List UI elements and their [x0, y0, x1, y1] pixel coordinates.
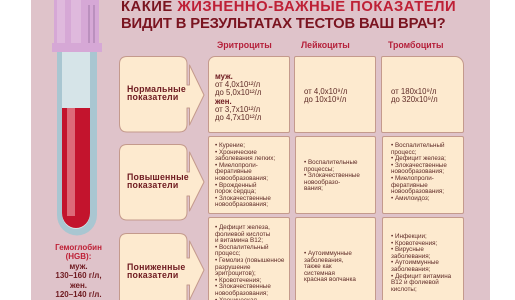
- cell: elevated erythrocytes: • Курение;: [215, 142, 245, 149]
- cell: elevated platelets: феративные: [391, 182, 428, 189]
- cell: reduced platelets: • Дефицит витамина: [391, 273, 451, 280]
- hemoglobin caption: (HGB):: [66, 252, 91, 261]
- cell: elevated platelets: • Миелопроли-: [391, 175, 434, 182]
- cell: normal platelets: от 180х10⁹/л: [391, 87, 437, 96]
- cell: elevated platelets: • Амилоидоз;: [391, 195, 430, 202]
- cell: elevated leukocytes: вания;: [304, 185, 323, 192]
- cell: elevated erythrocytes: • Злокачественные: [215, 195, 271, 202]
- cell: reduced erythrocytes: • Гемолиз (повышенное: [215, 257, 284, 264]
- cell: elevated leukocytes: процессы;: [304, 166, 334, 173]
- cell: elevated erythrocytes: • Миелопроли-: [215, 162, 258, 169]
- hemoglobin caption: муж.: [69, 262, 88, 271]
- cell: elevated platelets: • Злокачественные: [391, 162, 447, 169]
- cell: elevated erythrocytes: • Хронические: [215, 149, 257, 156]
- cell: elevated erythrocytes: феративные: [215, 168, 252, 175]
- cell: reduced erythrocytes: эритроцитов);: [215, 270, 256, 277]
- cell: normal platelets: [381, 56, 464, 133]
- cell: elevated platelets: • Дефицит железа;: [391, 155, 446, 162]
- cell: reduced erythrocytes: процесс;: [215, 250, 240, 257]
- cell: reduced leukocytes: также как: [304, 263, 332, 270]
- cell: normal erythrocytes: до 5,0х10¹²/л: [215, 88, 261, 97]
- row label: normal: показатели: [127, 92, 178, 102]
- title: ВИДИТ В РЕЗУЛЬТАТАХ ТЕСТОВ ВАШ ВРАЧ?: [121, 16, 446, 32]
- column heading: erythrocytes: Эритроциты: [217, 40, 272, 50]
- cell: elevated platelets: • Воспалительный: [391, 142, 444, 149]
- cell: elevated leukocytes: новообразо-: [304, 179, 340, 186]
- cell: reduced platelets: • Инфекции;: [391, 233, 427, 240]
- title: [121, 0, 456, 32]
- cell: reduced platelets: заболевания;: [391, 266, 430, 273]
- hemoglobin caption: жен.: [70, 281, 87, 290]
- cell: normal leukocytes: от 4,0х10⁹/л: [304, 87, 347, 96]
- cell: normal platelets: до 320х10⁹/л: [391, 95, 438, 104]
- cell: elevated leukocytes: • Воспалительные: [304, 159, 357, 166]
- cell: elevated platelets: новообразования;: [391, 188, 444, 195]
- cell: reduced platelets: • Кровотечения;: [391, 240, 437, 247]
- cell: normal erythrocytes: муж.: [215, 72, 233, 81]
- cell: normal erythrocytes: от 3,7х10¹²/л: [215, 105, 260, 114]
- cell: reduced erythrocytes: фолиевой кислоты: [215, 231, 270, 238]
- row label: normal: Нормальные: [127, 84, 186, 94]
- cell: elevated erythrocytes: [208, 136, 290, 214]
- cell: reduced leukocytes: красная волчанка: [304, 276, 356, 283]
- cell: elevated platelets: процесс;: [391, 149, 416, 156]
- cell: reduced leukocytes: заболевания,: [304, 257, 343, 264]
- row label: elevated: Повышенные: [127, 172, 189, 182]
- cell: reduced leukocytes: • Аутоиммунные: [304, 250, 352, 257]
- cell: reduced platelets: В12 и фолиевой: [391, 279, 439, 286]
- cell: normal erythrocytes: от 4,0х10¹²/л: [215, 80, 260, 89]
- cell: reduced platelets: • Аутоиммунные: [391, 259, 439, 266]
- column heading: leukocytes: Лейкоциты: [301, 40, 350, 50]
- cell: elevated erythrocytes: заболевания легких;: [215, 155, 275, 162]
- cell: normal erythrocytes: до 4,7х10¹²/л: [215, 113, 261, 122]
- cell: elevated leukocytes: • Злокачественные: [304, 172, 360, 179]
- cell: reduced platelets: кислоты;: [391, 286, 417, 293]
- cell: elevated erythrocytes: • Врожденный: [215, 182, 256, 189]
- column heading: platelets: Тромбоциты: [388, 40, 444, 50]
- hemoglobin caption: 120–140 г/л.: [55, 290, 102, 299]
- cell: elevated platelets: новообразования;: [391, 168, 444, 175]
- cell: reduced erythrocytes: • Злокачественные: [215, 283, 271, 290]
- cell: normal erythrocytes: [208, 56, 290, 133]
- cell: reduced leukocytes: [295, 217, 376, 300]
- row label: reduced: Пониженные: [127, 262, 185, 272]
- cell: reduced platelets: • Вирусные: [391, 246, 424, 253]
- hemoglobin caption: Гемоглобин: [55, 243, 102, 252]
- row label: reduced: [127, 262, 185, 280]
- cell: reduced erythrocytes: и витамина В12;: [215, 237, 263, 244]
- cell: reduced erythrocytes: разрушение: [215, 264, 250, 271]
- cell: elevated erythrocytes: новообразования;: [215, 175, 268, 182]
- cell: normal erythrocytes: жен.: [215, 97, 232, 106]
- cell: reduced erythrocytes: • Кровотечения;: [215, 277, 261, 284]
- cell: reduced leukocytes: системная: [304, 270, 335, 277]
- hemoglobin caption: [55, 243, 102, 299]
- cell: elevated erythrocytes: новообразования;: [215, 201, 268, 208]
- cell: reduced platelets: заболевания;: [391, 253, 430, 260]
- row label: elevated: показатели: [127, 180, 178, 190]
- cell: elevated leukocytes: [295, 136, 376, 214]
- row label: elevated: [127, 172, 189, 190]
- hemoglobin caption: 130–160 г/л,: [55, 271, 102, 280]
- cell: normal leukocytes: до 10х10⁹/л: [304, 95, 346, 104]
- cell: reduced platelets: [382, 217, 464, 300]
- cell: reduced erythrocytes: новообразования;: [215, 290, 268, 297]
- cell: elevated erythrocytes: порок сердца;: [215, 188, 256, 195]
- cell: reduced erythrocytes: [208, 217, 290, 300]
- cell: reduced erythrocytes: • Воспалительный: [215, 244, 268, 251]
- row label: normal: [127, 84, 186, 102]
- cell: reduced erythrocytes: • Дефицит железа,: [215, 224, 270, 231]
- cell: normal leukocytes: [294, 56, 376, 133]
- row label: reduced: показатели: [127, 270, 178, 280]
- cell: elevated platelets: [382, 136, 464, 214]
